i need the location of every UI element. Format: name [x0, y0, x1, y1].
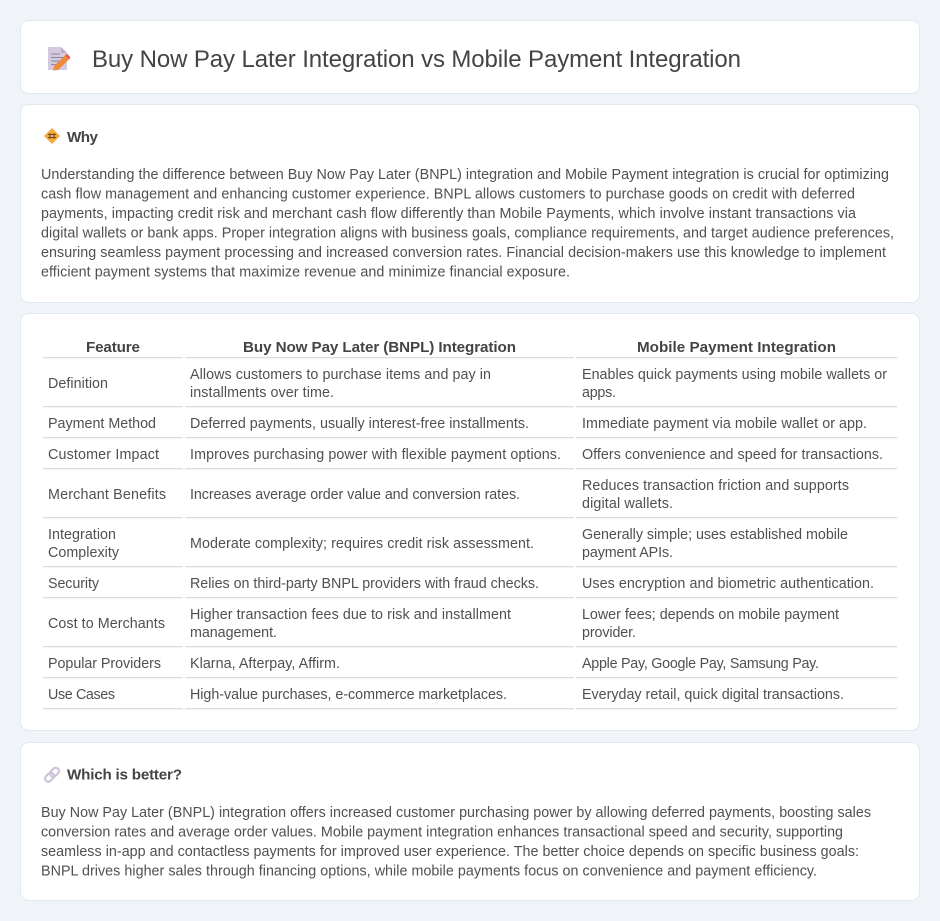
text block: why explanation: digital wallets or bank apps. Proper integration aligns with business goals, compliance requirements, and target audience preferences,: [41, 226, 894, 242]
table row: payment method: Immediate payment via mobile wallet or app.: [582, 416, 867, 432]
table row: popular providers: Apple Pay, Google Pay, Samsung Pay.: [582, 656, 819, 672]
table row: use cases: Use Cases: [48, 687, 115, 703]
table row: merchant benefits: Increases average order value and conversion rates.: [190, 487, 520, 503]
text block: why explanation: cash flow management and enhancing customer experience. BNPL allows customers to purchase goods on credit with deferred: [41, 186, 855, 202]
table row: integration complexity: Complexity: [48, 545, 120, 561]
table header row: Buy Now Pay Later (BNPL) Integration: [243, 339, 516, 356]
icon: document with pencil: [48, 47, 70, 70]
table row: definition: Enables quick payments using mobile wallets or: [582, 367, 887, 383]
table row: use cases: High-value purchases, e-commerce marketplaces.: [190, 687, 507, 703]
panel: comparison table: [20, 314, 920, 730]
table row: integration complexity: payment APIs.: [582, 545, 673, 561]
table row: use cases: [43, 687, 897, 709]
table row: merchant benefits: Merchant Benefits: [48, 487, 166, 503]
text block: why explanation: efficient payment systems that maximize revenue and minimize financial exposure.: [41, 264, 570, 280]
table row: security: Relies on third-party BNPL providers with fraud checks.: [190, 576, 539, 592]
table row: definition: Definition: [48, 376, 108, 392]
table row: popular providers: Klarna, Afterpay, Affirm.: [190, 656, 340, 672]
table header row: [43, 339, 897, 358]
table row: integration complexity: [43, 527, 897, 567]
text block: which is better explanation: [41, 805, 871, 880]
table row: customer impact: Offers convenience and speed for transactions.: [582, 447, 883, 463]
text block: why explanation: ensuring seamless payment processing and increased conversion rates. Financial decision-makers use this knowledge to implement: [41, 245, 886, 261]
icon: chain link: [44, 766, 60, 783]
text block: why explanation: Understanding the difference between Buy Now Pay Later (BNPL) integration and Mobile Payment integration is crucial for optimizing: [41, 167, 889, 183]
table row: cost to merchants: Lower fees; depends on mobile payment: [582, 607, 839, 623]
panel: title header: [20, 20, 920, 94]
table row: customer impact: [43, 447, 897, 469]
table row: cost to merchants: Cost to Merchants: [48, 616, 165, 632]
table row: merchant benefits: Reduces transaction friction and supports: [582, 478, 849, 494]
table row: definition: apps.: [582, 385, 616, 401]
panel: which is better: [20, 742, 920, 900]
text block: which is better explanation: seamless in-app and contactless payments for improved user experience. The better choice depends on specific business goals:: [41, 844, 859, 860]
icon: orange diamond: [44, 128, 60, 144]
table row: customer impact: Customer Impact: [48, 447, 159, 463]
table row: security: [43, 576, 897, 598]
heading: which is better: Which is better?: [67, 766, 182, 784]
table row: merchant benefits: digital wallets.: [582, 496, 673, 512]
table row: integration complexity: Generally simple; uses established mobile: [582, 527, 848, 543]
table row: definition: installments over time.: [190, 385, 334, 401]
text block: which is better explanation: BNPL drives higher sales through financing options, while mobile payments focus on convenience and payment efficiency.: [41, 864, 817, 880]
table row: popular providers: [43, 656, 897, 678]
table row: merchant benefits: [43, 478, 897, 518]
table row: definition: [43, 367, 897, 407]
table header row: Feature: [86, 339, 140, 356]
table row: payment method: Deferred payments, usually interest-free installments.: [190, 416, 529, 432]
table row: payment method: [43, 416, 897, 438]
table row: payment method: Payment Method: [48, 416, 156, 432]
table row: cost to merchants: provider.: [582, 625, 636, 641]
table row: customer impact: Improves purchasing power with flexible payment options.: [190, 447, 561, 463]
panel: why: [20, 104, 920, 302]
heading: why: Why: [67, 129, 99, 146]
title: Buy Now Pay Later Integration vs Mobile Payment Integration: [92, 46, 741, 73]
text block: which is better explanation: Buy Now Pay Later (BNPL) integration offers increased customer purchasing power by allowing deferred payments, boosting sales: [41, 805, 871, 821]
table row: security: Uses encryption and biometric authentication.: [582, 576, 874, 592]
text block: why explanation: payments, impacting credit risk and merchant cash flow differently than Mobile Payments, which involve instant transactions via: [41, 206, 856, 222]
text block: why explanation: [41, 167, 894, 280]
table row: cost to merchants: management.: [190, 625, 277, 641]
table row: cost to merchants: [43, 607, 897, 647]
table row: definition: Allows customers to purchase items and pay in: [190, 367, 491, 383]
table row: integration complexity: Moderate complexity; requires credit risk assessment.: [190, 536, 534, 552]
text block: which is better explanation: conversion rates and average order values. Mobile payment integration enhances transactional speed and security, supporting: [41, 824, 843, 840]
table row: cost to merchants: Higher transaction fees due to risk and installment: [190, 607, 511, 623]
table header row: Mobile Payment Integration: [637, 339, 836, 356]
table row: use cases: Everyday retail, quick digital transactions.: [582, 687, 844, 703]
table row: popular providers: Popular Providers: [48, 656, 161, 672]
table row: integration complexity: Integration: [48, 527, 116, 543]
table row: security: Security: [48, 576, 100, 592]
